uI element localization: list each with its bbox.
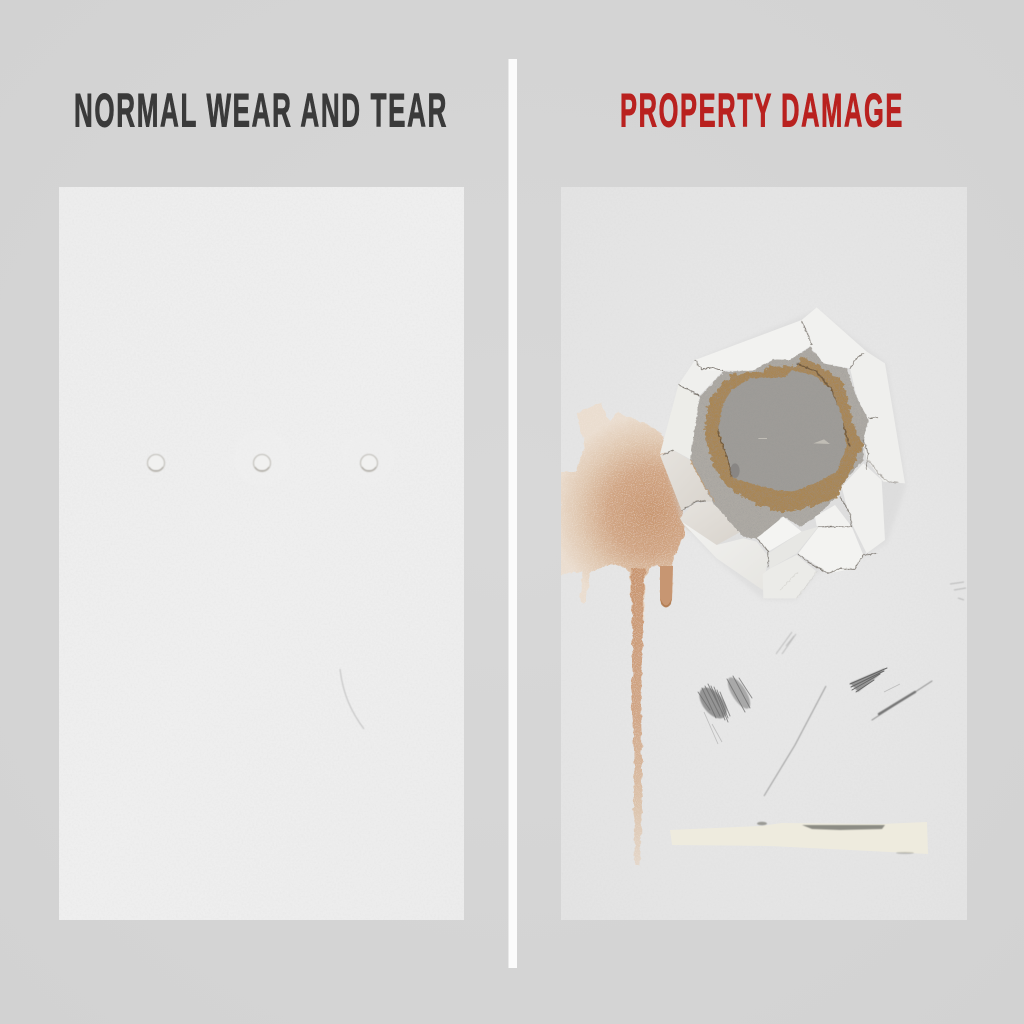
thin diagonal scratch — [764, 686, 826, 796]
lower front flaps — [757, 505, 863, 573]
icon: nail hole 2 — [234, 430, 290, 486]
gouge mark upper right — [850, 668, 900, 692]
gouge marks upper left — [694, 674, 754, 744]
exposed primer strip — [670, 822, 928, 854]
hole with torn drywall — [660, 307, 907, 600]
plaster marks — [758, 438, 830, 444]
panel: normal wear and tear wall — [59, 187, 464, 920]
long scrape right — [872, 681, 932, 720]
small scuff near hole — [776, 632, 796, 654]
smudges on strip — [757, 822, 914, 854]
dark recess edge — [718, 363, 850, 477]
crack lines — [663, 322, 898, 598]
short drip — [660, 566, 673, 607]
long drip — [631, 568, 645, 866]
icon: nail hole 1 — [148, 454, 164, 472]
icon: nail hole 3 — [342, 432, 394, 484]
concrete center — [718, 370, 847, 492]
brown core layer — [704, 356, 863, 513]
small marks at right edge — [950, 582, 966, 600]
soft shadow around flaps — [663, 310, 907, 600]
hairline scuff — [340, 669, 364, 729]
center divider — [508, 59, 517, 968]
plaster layer — [690, 347, 868, 538]
shaded spot — [730, 463, 740, 478]
water stain — [560, 403, 685, 866]
torn paper flaps — [660, 307, 905, 598]
panel: property damage wall — [560, 187, 967, 920]
heading: normal wear and tear: NORMAL WEAR AND TEAR — [74, 84, 448, 136]
